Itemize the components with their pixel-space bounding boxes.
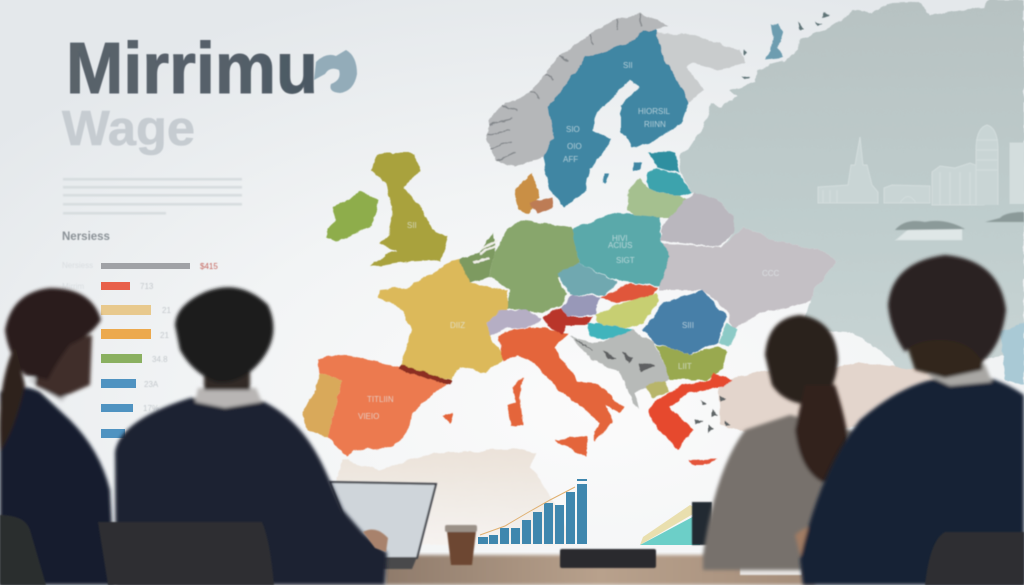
person four collar [928, 364, 992, 386]
bar values [62, 261, 218, 413]
person one hair [5, 288, 101, 380]
map labels: SII [623, 61, 633, 70]
person three hair [765, 315, 838, 405]
region: Italy [500, 327, 623, 440]
chart trend line [480, 487, 575, 535]
region: eastern shore [1000, 322, 1024, 385]
chart bars [478, 479, 587, 544]
region: Sweden and Finland [543, 30, 689, 207]
skyline: boat pier [896, 228, 962, 240]
bar values: 713 [140, 282, 154, 291]
region: Turkey [718, 362, 935, 436]
wedge teal [640, 513, 700, 545]
area chart: teal wedge [640, 505, 700, 545]
map labels: VIEIO [358, 412, 379, 421]
person one collar [28, 372, 68, 402]
person one [0, 288, 115, 585]
map labels: TITLIIN [367, 395, 394, 404]
laptop base [372, 557, 417, 569]
bar values: $415 [200, 262, 218, 271]
cup lid [445, 525, 477, 532]
wedge yellow [640, 505, 700, 545]
intro text block [63, 178, 242, 214]
laptop screen [330, 482, 436, 558]
bar values: 21 [160, 331, 169, 340]
small arctic islands [742, 12, 830, 80]
region: Switzerland [487, 310, 542, 335]
person four hair [888, 255, 1006, 362]
region: Sicily [555, 435, 587, 458]
person three ponytail [795, 385, 850, 483]
region: Estonia [648, 152, 679, 173]
black device on table [560, 549, 656, 568]
skyline: cathedral [818, 137, 878, 203]
person one ponytail [0, 345, 25, 452]
paper notebook [740, 557, 802, 575]
region: Russia [679, 0, 1024, 372]
bar values: 21 [162, 306, 171, 315]
person one face [35, 335, 92, 398]
person two neck [204, 372, 250, 390]
region: Ukraine [659, 227, 836, 330]
title line one: Mirrimu [66, 29, 318, 109]
region: Greece [648, 373, 733, 450]
person two hair [175, 287, 273, 383]
map labels: CCC [762, 269, 780, 278]
bar chart: bottom growth [478, 479, 587, 544]
laptop [330, 482, 436, 569]
map labels: ACIUS [608, 241, 632, 250]
skyline: arcade [884, 185, 930, 203]
region: North Macedonia [645, 380, 669, 398]
coffee cup [445, 525, 477, 565]
person three [703, 315, 865, 570]
chair centre left [98, 522, 274, 585]
map labels: SII [407, 221, 417, 230]
bar values: 34.8 [152, 355, 168, 364]
skyline: striped tower [976, 125, 998, 205]
region: Gotland and Saaremaa islands [602, 162, 641, 184]
bar chart heading: Nersiess [62, 231, 110, 243]
bar values: 23A [144, 380, 159, 389]
region: Norway [487, 14, 668, 167]
region: Romania [643, 290, 727, 355]
table [385, 555, 815, 585]
region: Kola [657, 33, 746, 103]
map labels: HIVI [612, 234, 628, 243]
region: Croatia [587, 323, 633, 338]
region: United Kingdom [371, 153, 448, 267]
region: Germany [489, 220, 579, 313]
map labels: SIII [682, 321, 694, 330]
bar values: Nersiess [62, 261, 93, 270]
region: France [378, 260, 507, 380]
skyline: classical hall [932, 163, 984, 205]
region: Balkans [570, 330, 670, 408]
region: Africa [337, 448, 575, 545]
chair right [925, 532, 1024, 585]
region: Denmark [514, 173, 540, 213]
region: Moldova [718, 323, 737, 348]
bar values: 17% [143, 404, 159, 413]
Norway fjord texture [488, 15, 640, 160]
region: Czechia [557, 263, 618, 295]
region: Corsica and Sardinia [507, 377, 523, 427]
person two collar [195, 388, 262, 408]
bar chart: left ranking [62, 231, 218, 438]
map labels: DIIZ [450, 321, 465, 330]
map labels [358, 61, 780, 421]
bar values: Mirrim [62, 282, 85, 291]
region: Benelux [459, 233, 495, 283]
region: Hungary [595, 293, 660, 330]
region: Balearic island [443, 413, 453, 423]
map labels: SIO [566, 125, 580, 134]
title map blob icon [314, 50, 357, 93]
region: Pyrenees [400, 367, 450, 383]
region: Latvia [647, 168, 691, 197]
region: Austria [560, 295, 600, 317]
region: Danish islands [529, 197, 553, 214]
person four face [905, 335, 985, 378]
person four hand [795, 527, 826, 558]
skyline illustration [818, 125, 1024, 240]
region: Alps dark [543, 307, 593, 335]
region: Lithuania [627, 178, 690, 218]
region: northern island [765, 23, 783, 60]
region: Portugal [303, 373, 342, 437]
region: Slovakia [600, 283, 658, 303]
map labels: OIO [567, 142, 582, 151]
map labels: SIGT [616, 256, 635, 265]
Aegean dark islands [695, 395, 730, 432]
region: Spain [318, 354, 450, 458]
Netherlands stripes [474, 240, 497, 262]
region: Poland [571, 213, 670, 287]
region: Belarus [661, 192, 734, 247]
map labels: AFF [563, 155, 578, 164]
map: Europe [303, 0, 1024, 545]
skyline: dark foliage [895, 212, 1024, 230]
person three jacket [703, 415, 865, 570]
person two suit [115, 398, 387, 585]
person four suit [800, 378, 1024, 585]
title line two: Wage [62, 102, 195, 156]
title: Minimum Wage heading [62, 29, 357, 156]
map labels: HIORSIL [638, 107, 671, 116]
region: Ireland [325, 192, 379, 242]
map labels: RIINN [644, 120, 666, 129]
region: Bulgaria [655, 345, 728, 380]
skyline: right block [1010, 143, 1024, 204]
chair left [0, 515, 46, 585]
cup body [447, 531, 476, 565]
hand on laptop [363, 530, 388, 552]
small laptop [692, 502, 712, 545]
person two [115, 287, 387, 585]
Balkans dark texture [575, 340, 654, 372]
person four [795, 255, 1024, 585]
region: Crete [688, 459, 717, 465]
bars [101, 263, 190, 438]
map labels: LIIT [678, 362, 692, 371]
person one body [0, 387, 115, 585]
